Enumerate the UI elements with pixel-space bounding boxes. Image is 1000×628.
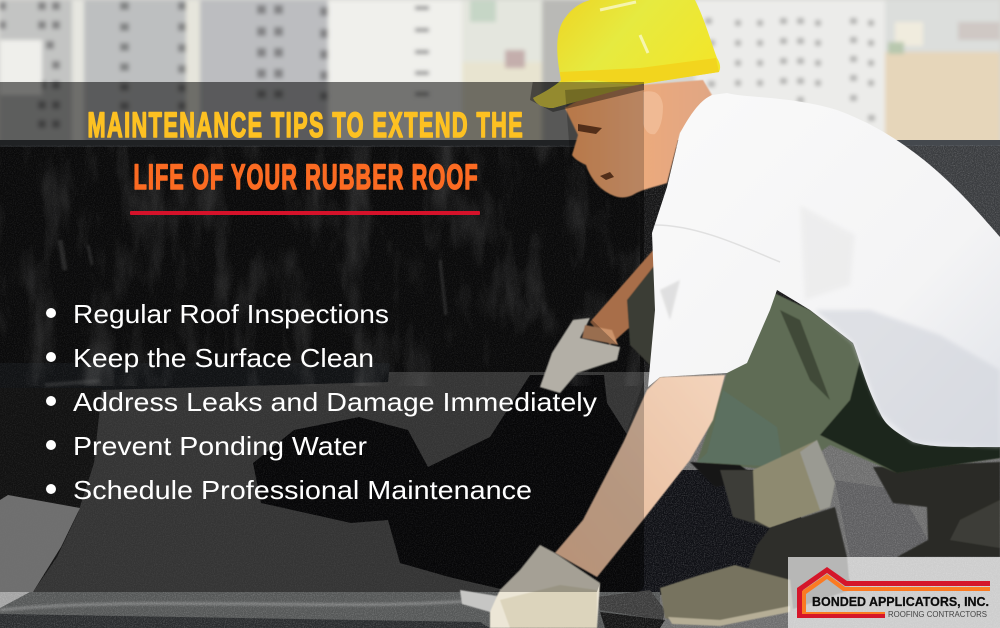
worker: front boot (660, 507, 850, 626)
worker: knee pad (720, 440, 835, 528)
worker: facial shadows (578, 124, 614, 180)
worker: far arm and glove (540, 248, 665, 393)
logo: red house outline (797, 567, 990, 618)
title line 1: MAINTENANCE TIPS TO EXTEND THE (88, 107, 523, 145)
tip 4: Prevent Ponding Water (73, 431, 367, 461)
tip 2: Keep the Surface Clean (73, 343, 374, 373)
worker: near forearm (555, 375, 725, 577)
tip 1: Regular Roof Inspections (73, 299, 389, 329)
background: black rubber roof wall and floor (0, 140, 1000, 628)
title: maintenance tips (88, 107, 523, 197)
texture: mottling, grain and scuffs on the rubber membrane (0, 145, 1000, 628)
worker: head and neck (565, 80, 712, 198)
worker: white t-shirt (648, 93, 1000, 447)
overlay tint on worker parts beneath the panel (490, 80, 644, 592)
worker: rear leg and boot (873, 462, 1000, 557)
bullet list: maintenance tips (46, 299, 597, 505)
logo: company name: BONDED APPLICATORS, INC. (812, 595, 989, 609)
background: blurred city skyline (0, 0, 1000, 147)
worker: ear (643, 91, 663, 134)
logo: orange house outline (802, 574, 990, 614)
tip 3: Address Leaks and Damage Immediately (73, 387, 597, 417)
panel: dark translucent overlay (0, 82, 644, 592)
title line 2: LIFE OF YOUR RUBBER ROOF (134, 159, 478, 197)
logo: tagline: ROOFING CONTRACTORS (888, 610, 987, 619)
title underline (130, 211, 480, 215)
worker: yellow hard hat (533, 0, 720, 108)
worker: trousers (690, 290, 1000, 487)
worker: near glove (460, 545, 600, 628)
logo: bonded applicators (788, 557, 1000, 628)
tip 5: Schedule Professional Maintenance (73, 475, 532, 505)
